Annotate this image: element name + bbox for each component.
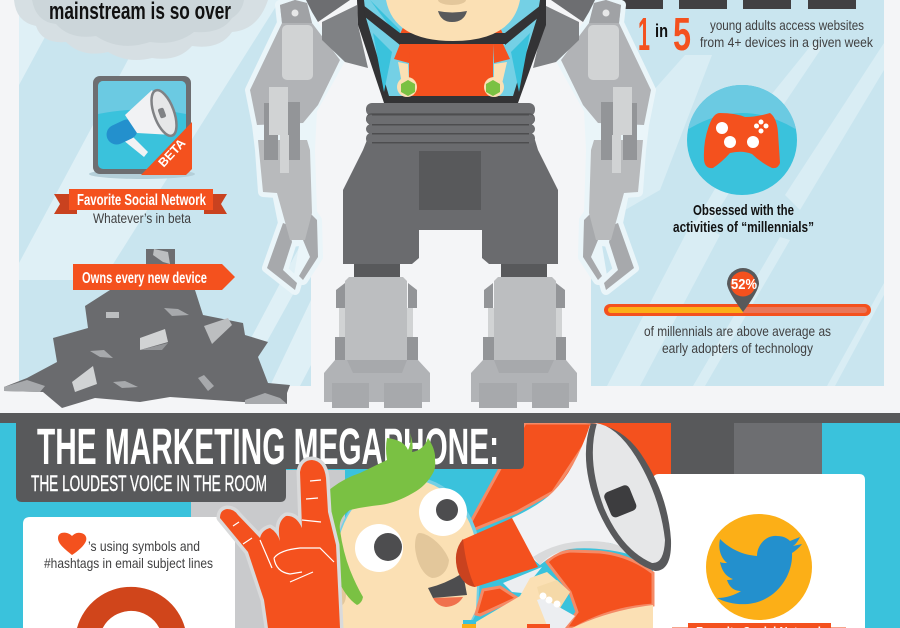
text: early adopters: of millennials are above average as bbox=[644, 323, 831, 339]
ribbon: favorite social network bbox=[672, 623, 846, 628]
text: obsessed with millennials bbox=[673, 202, 814, 236]
text: early adopters bbox=[644, 323, 831, 356]
text: obsessed with millennials: activities of “millennials” bbox=[673, 219, 814, 236]
robot suit bbox=[250, 0, 651, 408]
robot right leg bbox=[471, 190, 577, 408]
text: young adults: from 4+ devices in a given week bbox=[700, 34, 874, 50]
icon: heart bbox=[58, 533, 86, 555]
panel: twitter card bbox=[653, 474, 865, 628]
character with megaphone bbox=[220, 423, 671, 628]
title plate bbox=[16, 423, 524, 502]
burst wedge behind megaphone bbox=[468, 423, 596, 530]
section divider band bbox=[0, 413, 900, 423]
text: symbols: #hashtags in email subject lines bbox=[44, 555, 213, 571]
robot waist coil bbox=[366, 103, 535, 144]
text: symbols bbox=[44, 538, 213, 571]
section: marketing megaphone bbox=[0, 418, 900, 628]
subtitle: THE LOUDEST VOICE IN THE ROOM bbox=[31, 471, 267, 496]
title: THE MARKETING MEGAPHONE: bbox=[37, 418, 499, 475]
robot left arm bbox=[250, 0, 368, 290]
hair bbox=[324, 433, 435, 605]
icon: beta megaphone app: BETA bbox=[156, 136, 188, 170]
icon: twitter bird bbox=[706, 514, 812, 620]
arrow label: owns every new device: Owns every new device bbox=[82, 270, 207, 287]
stat: 1 in 5: 5 bbox=[673, 8, 691, 60]
text: young adults bbox=[700, 17, 874, 50]
progress bar 52%: 52% bbox=[731, 276, 757, 293]
robot cockpit frame bbox=[357, 0, 546, 103]
device pile bbox=[4, 249, 290, 408]
robot left leg bbox=[324, 190, 430, 408]
text: obsessed with millennials: Obsessed with the bbox=[693, 202, 794, 219]
stat: 1 in 5: 1 bbox=[638, 8, 650, 60]
arm and hand holding handle bbox=[462, 551, 653, 628]
arrow label: owns every new device bbox=[73, 264, 235, 290]
panel: left hipster stats bbox=[4, 0, 311, 408]
robot right arm bbox=[533, 0, 651, 290]
face bbox=[334, 476, 481, 628]
progress bar 52% bbox=[604, 268, 871, 316]
stat: 1 in 5 bbox=[638, 8, 691, 60]
icon: game controller bbox=[687, 85, 797, 195]
text: symbols: ’s using symbols and bbox=[88, 538, 200, 554]
panel: right hipster stats bbox=[591, 0, 884, 386]
cloud with headline bbox=[14, 0, 268, 60]
text: whatever's in beta: Whatever’s in beta bbox=[93, 210, 191, 226]
icon: beta megaphone app bbox=[89, 76, 195, 179]
favorite social network ribbon: Favorite Social Network bbox=[77, 192, 206, 209]
donut chart bbox=[77, 587, 185, 628]
robot torso bbox=[343, 140, 558, 270]
text: young adults: young adults access websites bbox=[710, 17, 864, 33]
megaphone bbox=[456, 423, 671, 587]
hand gesture bbox=[220, 460, 340, 628]
stat: 1 in 5: in bbox=[655, 21, 668, 41]
text: early adopters: early adopters of technology bbox=[662, 340, 813, 356]
favorite social network ribbon bbox=[54, 189, 227, 214]
panel: symbols card bbox=[23, 517, 235, 628]
background stripes bbox=[0, 423, 900, 628]
device tiles bbox=[620, 0, 856, 9]
pilot character bbox=[386, 0, 520, 97]
